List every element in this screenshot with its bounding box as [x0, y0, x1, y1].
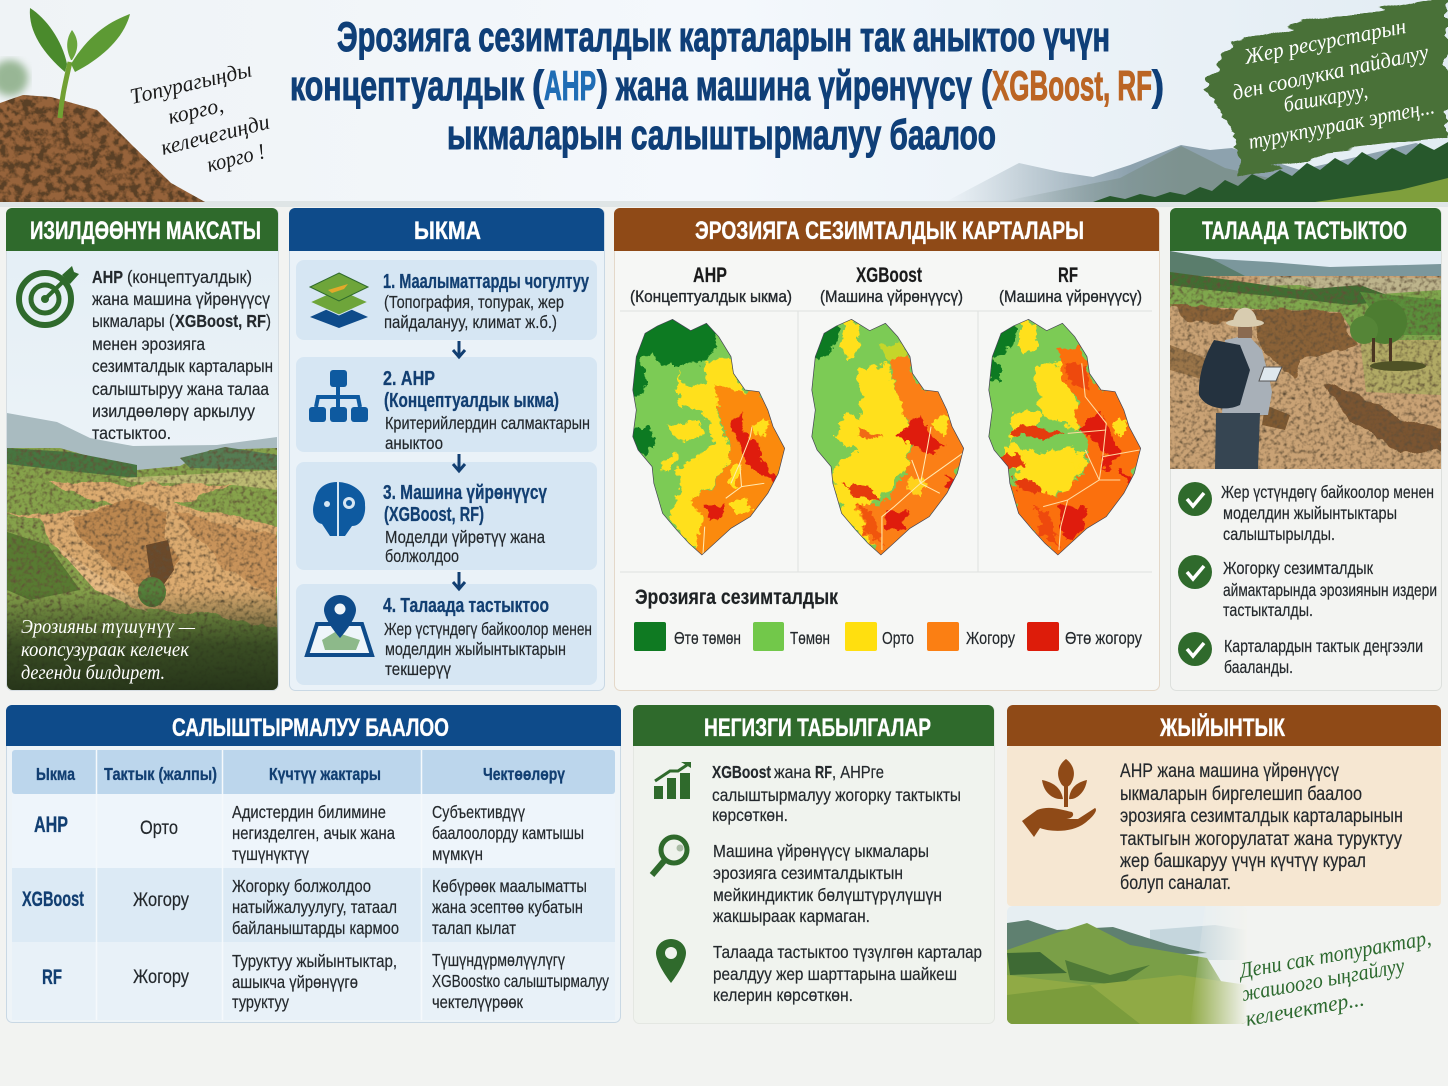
handwritten note [1236, 925, 1433, 1031]
panel: conclusion [1007, 705, 1441, 1031]
table header row [12, 750, 615, 794]
photo: green hills [1007, 906, 1247, 1024]
handwritten note: left: келечегиңди [158, 109, 272, 160]
checklist item 2 [1178, 555, 1437, 620]
table row: RF: XGBoostко салыштырмалуу [432, 971, 609, 991]
column title: XGBoost [820, 264, 963, 306]
table row: AHP: баалоолорду камтышы [432, 823, 584, 843]
conclusion text: жер башкаруу үчүн күчтүү курал [1120, 851, 1366, 872]
checklist item 1 [1178, 482, 1434, 544]
table row: AHP: негизделген, ачык жана [232, 823, 395, 843]
table header row: Тактык (жалпы) [104, 764, 217, 784]
step 3: Моделди үйрөтүү жана [385, 527, 545, 547]
map legend: Эрозияга сезимталдык [635, 586, 838, 609]
panel heading [289, 208, 604, 251]
column title: AHP: (Концептуалдык ыкма) [630, 287, 792, 306]
finding 3: реалдуу жер шарттарына шайкеш [713, 964, 957, 984]
checklist item 3 [1178, 632, 1423, 677]
icon: location pin [656, 939, 686, 983]
table row: AHP: Адистердин билимине [232, 802, 386, 822]
handwritten note: Дени сак топурактар, [1236, 925, 1433, 983]
landscape photo: eroded gully [7, 413, 278, 690]
table row: RF: туруктуу [232, 992, 289, 1012]
finding 1: жана [774, 762, 811, 782]
panel body text: менен эрозияга [92, 334, 205, 354]
column title: RF: (Машина үйрөнүүсү) [999, 287, 1142, 306]
column title: AHP [630, 264, 792, 306]
title: ) [597, 62, 608, 109]
panel heading: ЭРОЗИЯГА СЕЗИМТАЛДЫК КАРТАЛАРЫ [695, 217, 1084, 245]
researcher [1222, 335, 1272, 415]
panel body text: салыштыруу жана талаа [92, 379, 269, 399]
panel heading: ЖЫЙЫНТЫК [1159, 712, 1286, 742]
panel heading [614, 208, 1159, 251]
map legend: Өтө төмөн [674, 628, 741, 648]
illustration: meadow [1315, 178, 1448, 202]
panel: key findings [633, 705, 994, 1024]
step 2 [296, 357, 597, 453]
map: XGBoost [811, 319, 964, 556]
table row: XGBoost: Көбүрөөк маалыматты [432, 876, 587, 896]
table row: RF: ашыкча үйрөнүүгө [232, 972, 358, 992]
map legend: Орто [882, 628, 914, 648]
table row: XGBoost [12, 868, 615, 942]
arrow [453, 341, 465, 357]
step 1 [296, 260, 597, 340]
table row: XGBoost: Жогору [133, 890, 189, 911]
panel body text: жана машина үйрөнүүсү [92, 289, 270, 309]
map legend: Төмөн [790, 628, 830, 648]
illustration: forest [1093, 142, 1448, 202]
finding 1: көрсөткөн. [712, 805, 788, 825]
title: Эрозияга сезимталдык карталарын так аныктоо үчүн [337, 13, 1110, 60]
finding 1: XGBoost [712, 762, 771, 782]
handwritten note: left: корго ! [204, 138, 267, 177]
table row: XGBoost: жана эсептөө кубатын [432, 897, 583, 917]
conclusion text [1120, 761, 1403, 894]
finding 3 [656, 939, 982, 1005]
photo: researcher at gully [1170, 251, 1441, 469]
step 1: 1. Маалыматтарды чогултуу [383, 270, 589, 293]
panel heading [6, 705, 621, 746]
panel heading [633, 705, 994, 746]
table row: RF: RF [42, 966, 62, 989]
panel body text: изилдөөлөрү аркылуу [92, 401, 255, 421]
icon: magnifier [652, 837, 687, 875]
table row: AHP: Субъективдүү [432, 802, 525, 822]
step 3: (XGBoost, RF) [384, 503, 484, 526]
finding 3: келерин көрсөткөн. [713, 985, 853, 1005]
illustration: soil mound with sprout [0, 8, 205, 202]
finding 3: Талаада тастыктоо түзүлгөн карталар [713, 942, 982, 962]
step 3: 3. Машина үйрөнүүсү [383, 481, 547, 504]
table row: XGBoost: талап кылат [432, 918, 516, 938]
handwritten note: right: ден соолукка пайдалуу [1230, 39, 1431, 105]
arrow [453, 572, 465, 589]
caption [21, 616, 195, 684]
illustration: distant mountains [945, 143, 1448, 202]
panel heading: САЛЫШТЫРМАЛУУ БААЛОО [172, 714, 449, 742]
panel body text: АНР [92, 267, 123, 287]
icon: map pin [307, 595, 372, 655]
finding 1: RF [815, 762, 832, 782]
column title: RF [999, 264, 1142, 306]
step 4 [296, 584, 597, 685]
table header row: Ыкма [36, 764, 75, 784]
handwritten note: right: Жер ресурстарын [1241, 13, 1408, 69]
table row: AHP: AHP [34, 812, 68, 837]
map legend: Өтө жогору [1065, 628, 1142, 648]
panel body text: XGBoost, RF [175, 311, 266, 331]
table row: RF: Түшүндүрмөлүүлүгү [432, 950, 565, 970]
handwritten note: left [128, 57, 272, 177]
finding 2: мейкиндиктик бөлүштүрүлүшүн [713, 885, 942, 905]
table header row: Күчтүү жактары [269, 764, 381, 784]
table row: XGBoost: байланыштарды кармоо [232, 918, 399, 938]
panel: erosion susceptibility maps [614, 208, 1160, 690]
panel heading: НЕГИЗГИ ТАБЫЛГАЛАР [704, 714, 931, 742]
step 4: текшерүү [385, 659, 451, 679]
table row: RF: чектелүүрөөк [432, 992, 523, 1012]
conclusion text: ыкмаларын биргелешип баалоо [1120, 784, 1362, 805]
panel body text: ыкмалары ( [92, 311, 174, 331]
table row: RF: Жогору [133, 967, 189, 988]
panel body text: сезимталдык карталарын [92, 356, 273, 376]
panel: method [289, 208, 604, 690]
table row: XGBoost: натыйжалуулугу, татаал [232, 897, 397, 917]
panel body text [92, 267, 273, 443]
table row: RF [12, 942, 615, 1020]
panel heading [6, 208, 278, 251]
title: ( [981, 62, 992, 109]
checklist item 1: салыштырылды. [1223, 524, 1335, 544]
title: AHP [544, 62, 596, 109]
title: концептуалдык [290, 62, 525, 109]
handwritten note: жашоого ыңгайлуу [1240, 953, 1407, 1006]
column title: AHP: AHP [693, 264, 727, 287]
finding 1: салыштырмалуу жогорку тактыкты [712, 785, 961, 805]
step 4: Жер үстүндөгү байкоолор менен [384, 619, 592, 639]
step 1: пайдалануу, климат ж.б.) [384, 312, 557, 332]
step 2: аныктоо [385, 433, 443, 453]
panel: research aim [6, 208, 278, 690]
panel: field validation [1170, 208, 1442, 690]
title: жана машина үйрөнүүсү [615, 62, 972, 109]
finding 1: , АНРге [832, 762, 884, 782]
handwritten note: right [1230, 13, 1436, 154]
title: ( [532, 62, 544, 109]
table row: XGBoost: Жогорку болжолдоо [232, 876, 371, 896]
step 3: болжолдоо [385, 546, 459, 566]
caption: коопсузураак келечек [21, 639, 190, 661]
finding 2: эрозияга сезимталдыктын [713, 863, 903, 883]
table row: AHP: түшүнүктүү [232, 844, 309, 864]
finding 2 [652, 837, 942, 926]
step 1: (Топография, топурак, жер [384, 292, 564, 312]
checklist item 1: моделдин жыйынтыктары [1223, 503, 1397, 523]
arrow [453, 454, 465, 471]
column title: XGBoost: XGBoost [856, 264, 922, 287]
panel heading: ИЗИЛДӨӨНҮН МАКСАТЫ [30, 217, 261, 245]
step 4: 4. Талаада тастыктоо [383, 594, 549, 617]
icon: data layers [310, 273, 368, 328]
illustration: green brush banner [1204, 0, 1448, 175]
map legend: Жогору [966, 628, 1015, 648]
table row: RF: Туруктуу жыйынтыктар, [232, 951, 397, 971]
title: ) [1152, 62, 1164, 109]
table row: AHP: Орто [140, 818, 178, 839]
map legend [634, 586, 1142, 651]
conclusion text: болуп саналат. [1120, 873, 1231, 894]
header banner [0, 0, 1448, 207]
step 3 [296, 462, 597, 570]
column title: XGBoost: (Машина үйрөнүүсү) [820, 287, 963, 306]
panel body text: (концептуалдык) [127, 267, 252, 287]
conclusion text: эрозияга сезимталдык карталарынын [1120, 806, 1403, 827]
table row: AHP [12, 794, 615, 868]
title: XGBoost, RF [992, 62, 1152, 109]
icon: rising bar chart [654, 762, 691, 799]
panel: comparison table [6, 705, 621, 1022]
step 2: Критерийлердин салмактарын [385, 413, 590, 433]
conclusion text: тактыгын жогорулатат жана туруктуу [1120, 829, 1402, 850]
checklist item 2: тастыкталды. [1223, 600, 1313, 620]
panel heading: ЫКМА [414, 217, 481, 245]
checklist item 3: бааланды. [1224, 657, 1293, 677]
panel heading [1007, 705, 1441, 746]
conclusion text: АНР жана машина үйрөнүүсү [1120, 761, 1339, 782]
handwritten note: left: Топурагыңды [128, 57, 254, 109]
panel heading [1170, 208, 1441, 251]
handwritten note: right: башкаруу, [1282, 78, 1370, 117]
handwritten note: келечектер... [1244, 985, 1366, 1031]
handwritten note: left: корго, [166, 92, 226, 129]
finding 2: Машина үйрөнүүсү ыкмалары [713, 841, 929, 861]
step 4: моделдин жыйынтыктарын [385, 639, 566, 659]
icon: target with arrow [19, 266, 79, 325]
caption: Эрозияны түшүнүү — [21, 616, 195, 638]
column title: RF: RF [1058, 264, 1078, 287]
title: ыкмаларын салыштырмалуу баалоо [447, 111, 996, 158]
step 2: (Концептуалдык ыкма) [384, 389, 559, 412]
panel body text: ) [266, 311, 271, 331]
panel body text: тастыктоо. [92, 423, 171, 443]
title [290, 13, 1164, 158]
table row: AHP: мүмкүн [432, 844, 483, 864]
finding 2: жакшыраак кармаган. [713, 906, 870, 926]
map: AHP [632, 319, 785, 556]
table row: XGBoost: XGBoost [22, 888, 84, 911]
finding 1 [654, 762, 961, 825]
step 2: 2. АНР [383, 367, 435, 390]
checklist item 2: Жогорку сезимталдык [1223, 558, 1373, 578]
map: RF [988, 319, 1141, 556]
icon: hierarchy [309, 370, 368, 422]
icon: AI head [313, 482, 365, 536]
icon: hand holding sprout [1022, 759, 1096, 837]
caption: дегенди билдирет. [21, 662, 165, 684]
table header row: Чектөөлөрү [483, 764, 565, 784]
